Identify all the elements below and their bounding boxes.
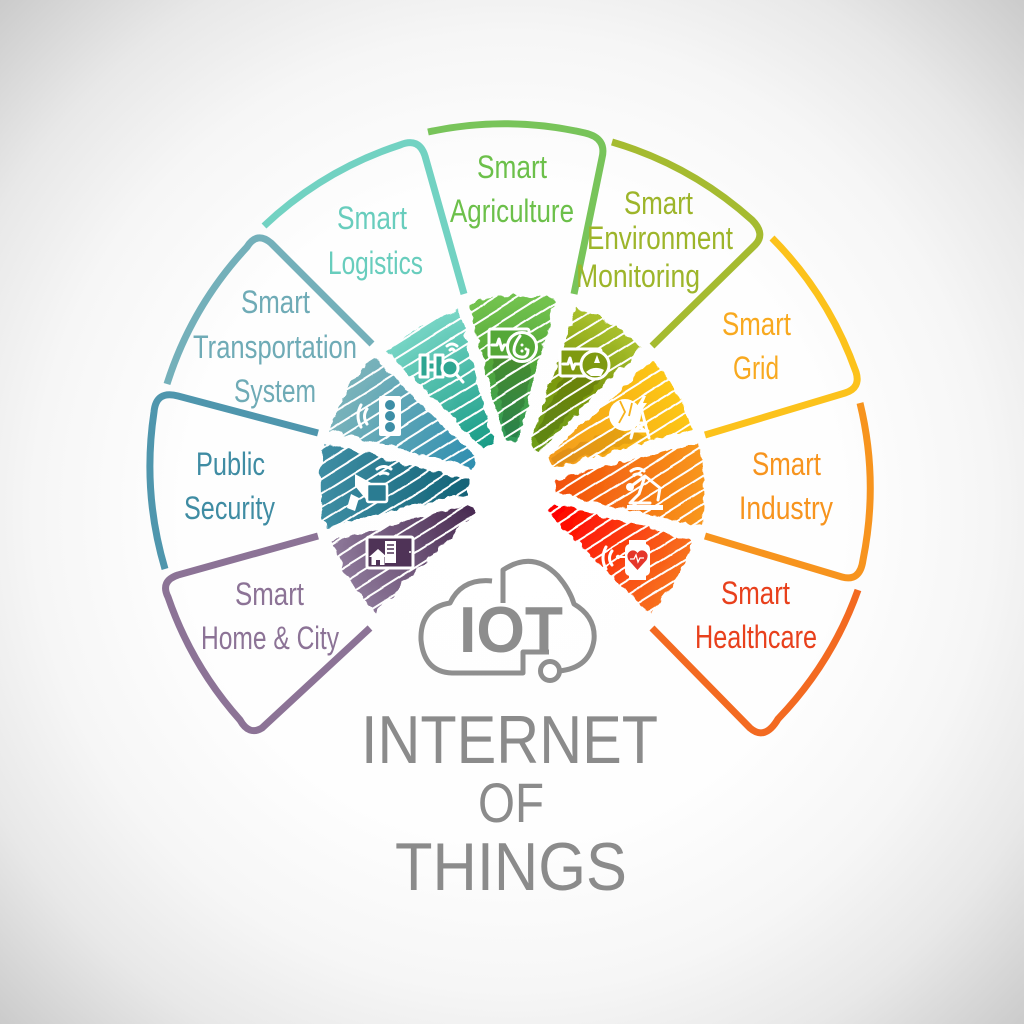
title line: OF: OF [478,771,544,834]
label: Smart Healthcare [695,575,817,655]
label: Smart Environment Monitoring [576,185,733,294]
label: Smart Agriculture [450,149,574,229]
icon: sensor window with drop [489,329,536,362]
label: Smart Industry [739,446,833,526]
label: Smart Industry: Smart [752,446,821,482]
outline: Smart Industry [705,403,870,578]
label: Smart Environment Monitoring: Smart [624,185,693,221]
scribble wedge: steel blue [330,357,475,468]
label: Public Security [184,446,275,526]
outline: Smart Grid [705,238,857,435]
icon: logistics map with magnifier [420,344,463,382]
icon: tablet with house [367,537,413,568]
scribble wedge: red [548,503,693,613]
label: Smart Environment Monitoring: Monitoring [576,258,700,294]
label: Public Security: Public [196,446,265,482]
label: Smart Healthcare: Smart [721,575,790,611]
cloud right lobe [503,561,594,671]
title line: INTERNET: INTERNET [361,702,658,778]
label: Smart Agriculture: Agriculture [450,193,574,229]
label: Smart Grid [722,306,791,386]
panel: Smart Transportation System [167,238,475,468]
label: Smart Transportation System: Smart [241,284,310,320]
label: Public Security: Security [184,490,275,526]
panel: Smart Logistics [264,143,494,448]
panel: Smart Environment Monitoring [530,142,760,450]
label: Smart Home & City: Smart [235,576,304,612]
icon: traffic light [358,396,401,436]
outline: Smart Transportation System [167,238,372,384]
panel: Smart Grid [548,238,857,468]
scribble wedge: teal blue [320,443,468,527]
IOT lettering: IOT [459,593,563,666]
outline: Public Security [150,395,318,569]
IOT cloud logo [421,561,594,680]
title: INTERNET OF THINGS [361,702,658,905]
connector node [540,662,560,680]
label: Smart Environment Monitoring: Environment [587,220,733,256]
scribble wedge: olive [530,308,642,450]
label: Smart Grid: Smart [722,306,791,342]
outline: Smart Home & City [166,536,370,731]
scribble wedge: green [468,296,555,442]
scribble wedge: orange [555,443,705,527]
scribble wedge: amber [548,360,692,468]
outline: Smart Healthcare [652,590,858,733]
scribble wedge: purple [331,505,476,612]
panel: Smart Agriculture [428,124,603,442]
icon: security camera [347,466,391,511]
label: Smart Transportation System [193,284,357,409]
panel: Smart Home & City [166,505,476,731]
icon: smart watch with heart [603,540,650,580]
icon shadow: amber wedge [552,428,650,466]
label: Smart Agriculture: Smart [477,149,547,185]
label: Smart Industry: Industry [739,490,833,526]
scribble wedge: mint [387,310,494,448]
icon: globe and power tower [609,396,649,438]
outline: Smart Logistics [264,143,464,294]
label: Smart Logistics: Smart [337,200,407,236]
icon shadow: green wedge [492,358,532,438]
label: Smart Logistics: Logistics [328,245,423,281]
panel: Smart Industry [555,403,870,578]
label: Smart Home & City: Home & City [201,620,339,656]
icon: robot arm [626,468,663,510]
label: Smart Healthcare: Healthcare [695,619,817,655]
panel: Public Security [150,395,468,569]
outline: Smart Environment Monitoring [612,142,760,346]
label: Smart Transportation System: System [234,373,316,409]
icon: sensor window with landscape [560,349,609,379]
label: Smart Transportation System: Transportation [193,329,357,365]
panel: Smart Healthcare [548,503,858,733]
outline: Smart Agriculture [428,124,603,294]
icon shadow: olive wedge [534,378,600,445]
cloud outline [421,581,549,673]
label: Smart Grid: Grid [733,350,779,386]
label: Smart Logistics [328,200,423,281]
title line: THINGS: THINGS [395,829,627,905]
label: Smart Home & City [201,576,339,656]
